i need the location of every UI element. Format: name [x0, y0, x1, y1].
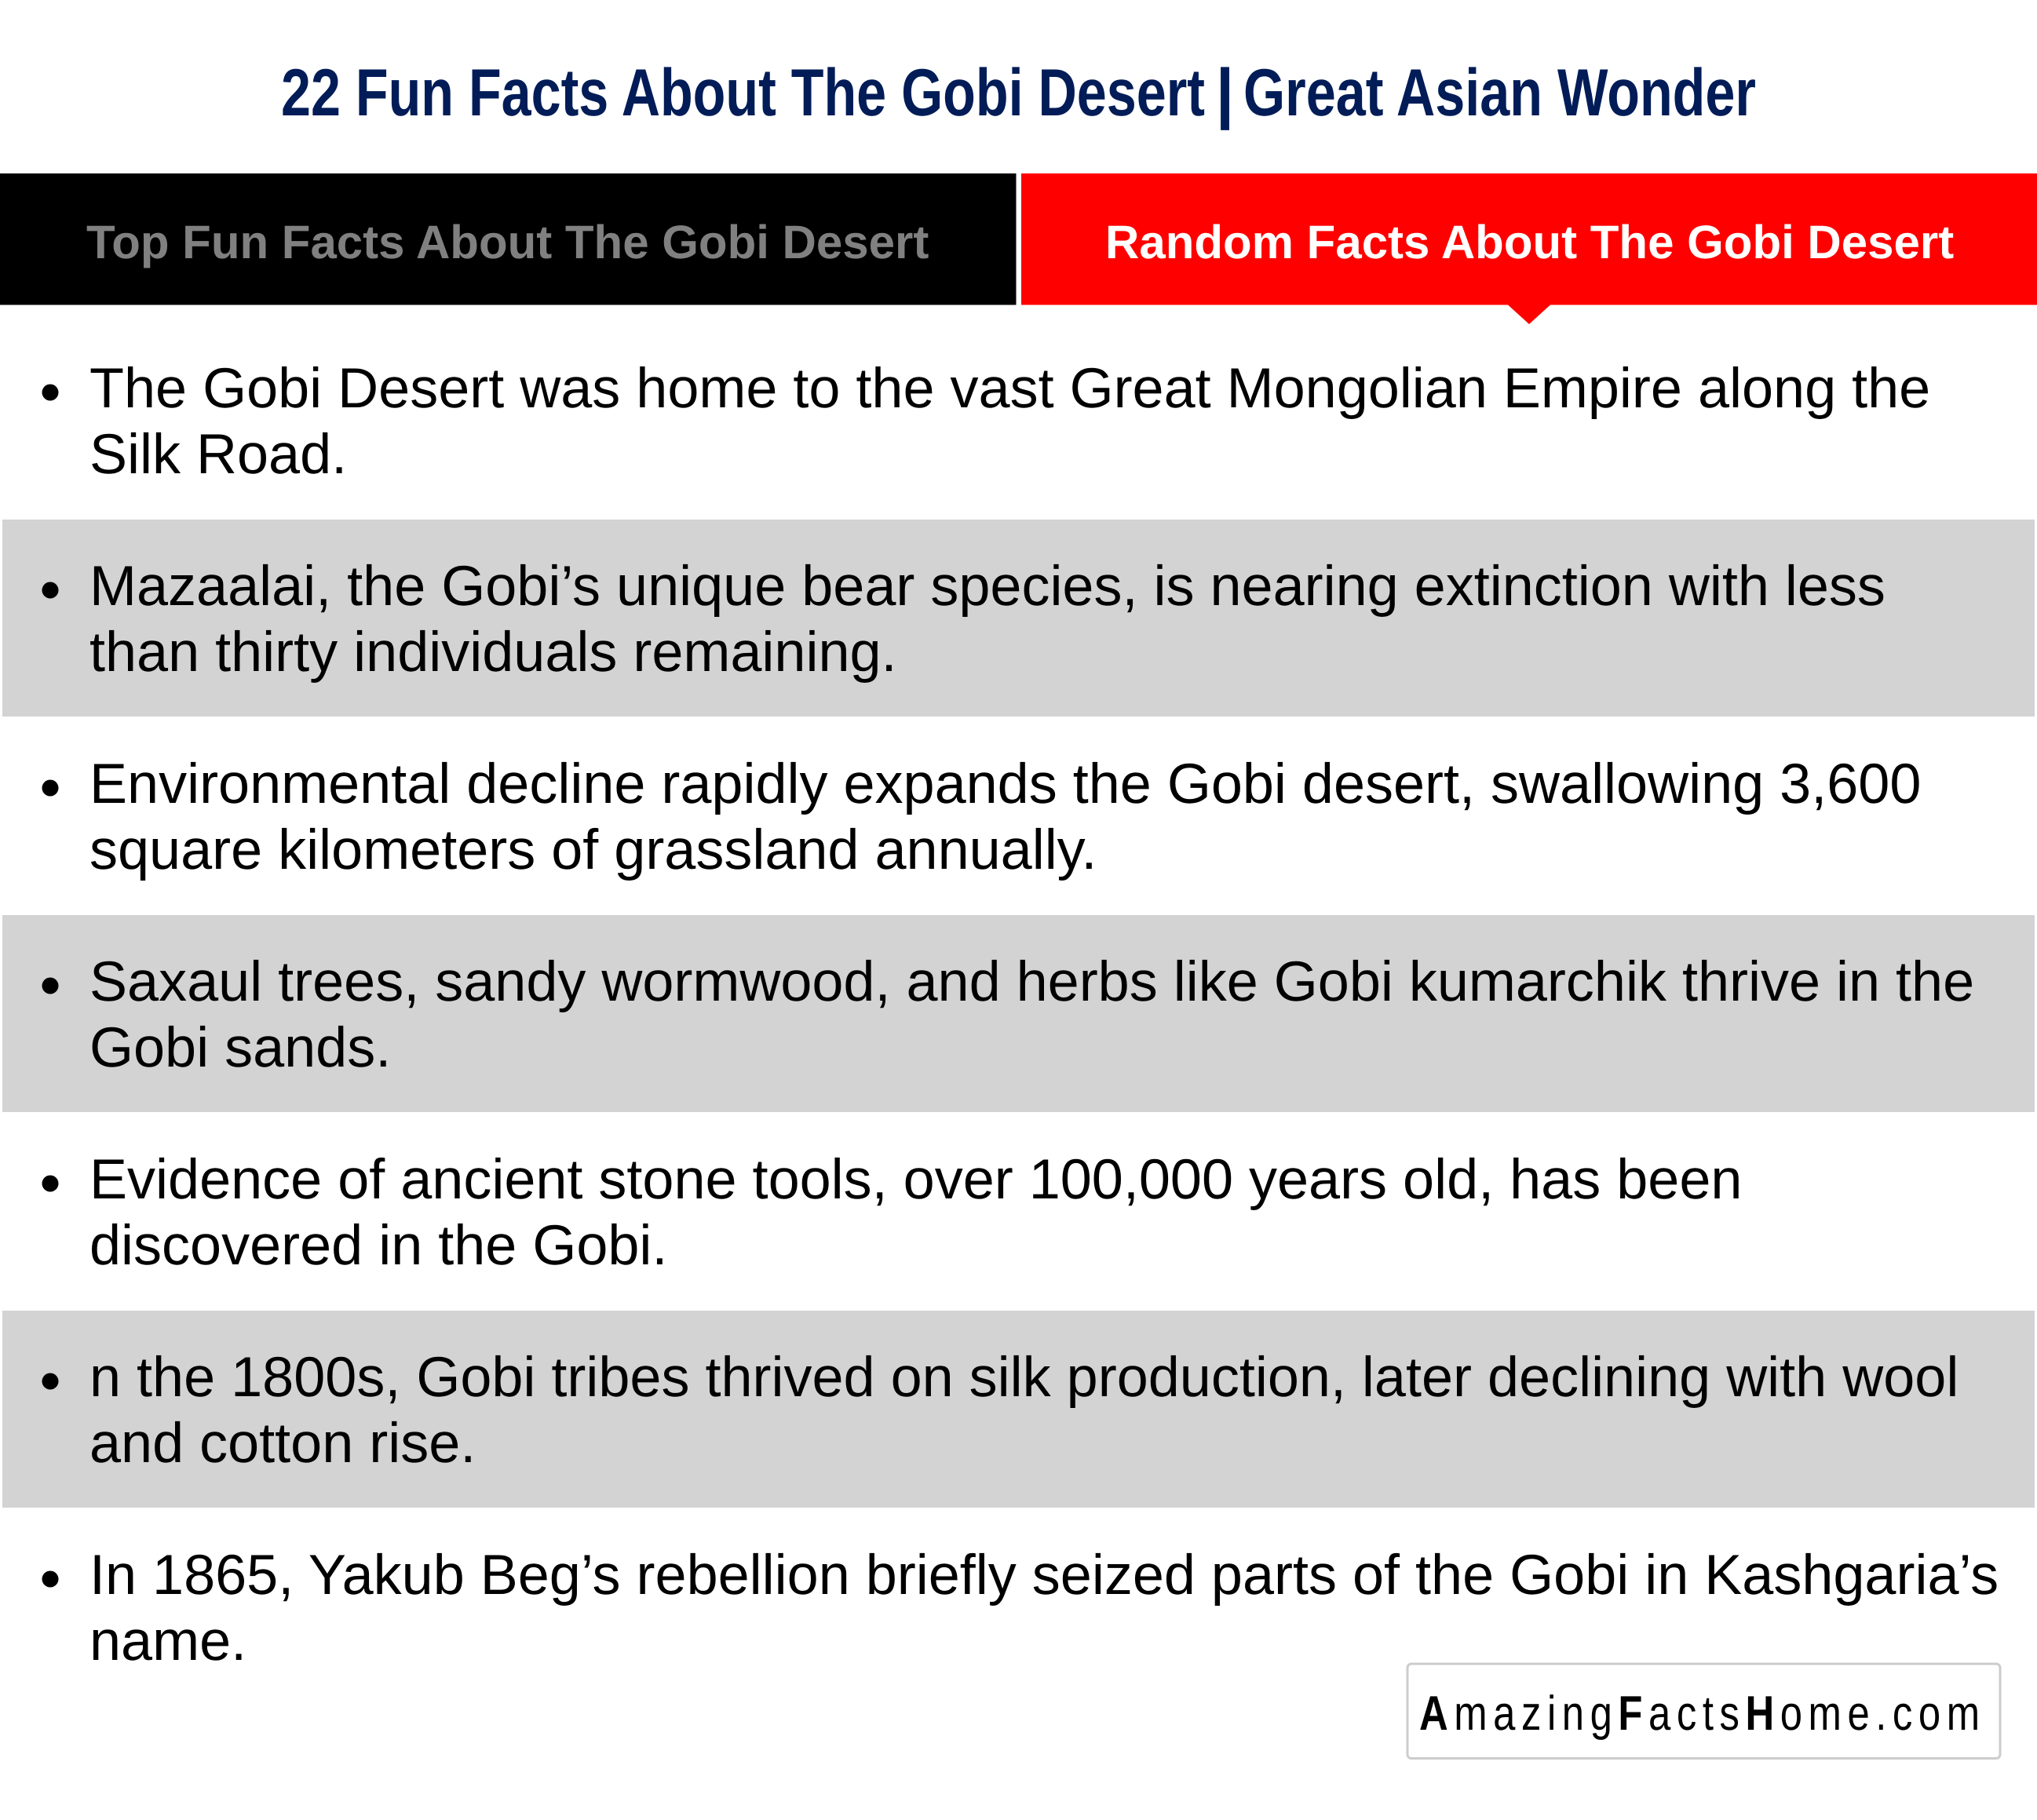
fact 5: discovered in the Gobi.: [89, 1214, 667, 1277]
fact 4: Gobi sands.: [89, 1016, 391, 1079]
fact 6: and cotton rise.: [89, 1412, 476, 1475]
fact 4: Saxaul trees, sandy wormwood, and herbs like Gobi kumarchik thrive in the: [89, 950, 1974, 1013]
title: |: [1216, 56, 1234, 130]
fact 5: [42, 1148, 1742, 1277]
fact 3: Environmental decline rapidly expands the Gobi desert, swallowing 3,600: [89, 753, 1921, 815]
fact 3: [42, 753, 1921, 881]
fact 2: Mazaalai, the Gobi’s unique bear species, is nearing extinction with less: [89, 555, 1886, 618]
fact 1: The Gobi Desert was home to the vast Great Mongolian Empire along the: [89, 357, 1930, 420]
tab: random facts: Random Facts About The Gobi Desert: [1105, 216, 1954, 268]
fact 1: Silk Road.: [89, 423, 347, 486]
fact 7: In 1865, Yakub Beg’s rebellion briefly seized parts of the Gobi in Kashgaria’s: [89, 1544, 1999, 1607]
fact 4: [2, 915, 2035, 1112]
fact 7: name.: [89, 1610, 246, 1672]
fact 6: n the 1800s, Gobi tribes thrived on silk production, later declining with wool: [89, 1346, 1959, 1409]
fact 2: than thirty individuals remaining.: [89, 621, 897, 684]
fact 7: [42, 1544, 1999, 1672]
title: 22 Fun Facts About The Gobi Desert: [281, 56, 1205, 130]
fact 3: square kilometers of grassland annually.: [89, 819, 1097, 881]
title: Great Asian Wonder: [1243, 56, 1756, 130]
tab: top fun facts: Top Fun Facts About The Gobi Desert: [86, 216, 929, 268]
tab: random facts: [1021, 173, 2037, 324]
fact 2: [2, 520, 2035, 717]
watermark badge: AmazingFactsHome.com: [1419, 1687, 1986, 1741]
fact 5: Evidence of ancient stone tools, over 100,000 years old, has been: [89, 1148, 1742, 1211]
tab: top fun facts: [0, 173, 1016, 305]
fact 1: [42, 357, 1930, 486]
watermark badge: [1407, 1664, 2000, 1758]
fact 6: [2, 1311, 2035, 1508]
